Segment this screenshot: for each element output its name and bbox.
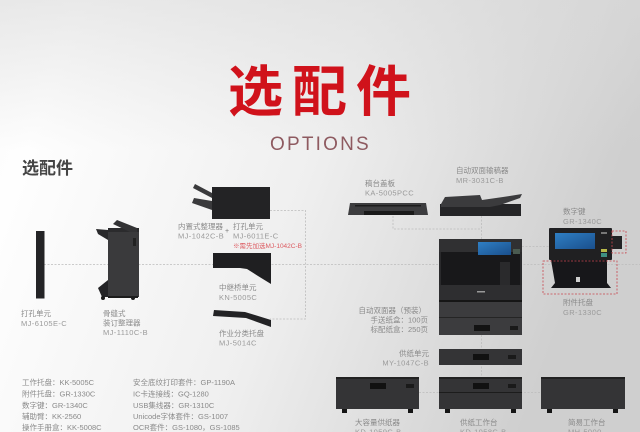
label: large capacity feeder: 大容量供纸器 [355, 417, 400, 427]
icon: bridge unit [213, 253, 271, 284]
label: saddle finisher: MJ-1110C-B [103, 328, 148, 337]
label: duplex document feeder: MR-3031C-B [456, 176, 504, 185]
tray highlight [543, 261, 617, 294]
keypad highlight [612, 231, 626, 253]
connector lines [44, 210, 640, 392]
icon: accessory tray [551, 260, 611, 288]
accessories list left: 辅助臂：KK-2560 [22, 411, 81, 421]
label: paper feed unit [382, 348, 429, 368]
label: automatic duplexer [358, 305, 428, 334]
label: punch unit MJ-6011E-C: MJ-6011E-C [233, 232, 279, 240]
label: inner finisher: 内置式整理器 [178, 221, 223, 231]
accessories list left: 数字键：GR-1340C [22, 400, 88, 410]
label: automatic duplexer: 标配纸盒：250页 [370, 324, 428, 334]
label: job separator tray: 作业分类托盘 [219, 328, 264, 338]
label: paper feed pedestal: 供纸工作台 [460, 417, 498, 427]
label: automatic duplexer: 手送纸盒：100页 [370, 314, 428, 324]
icon: control panel [549, 228, 622, 260]
section heading: 选配件 [22, 159, 73, 178]
label: accessory tray: 附件托盘 [563, 297, 593, 307]
label: saddle finisher: 骨缝式 [103, 308, 126, 318]
icon: inner finisher [192, 184, 270, 219]
label: bridge unit: KN-5005C [219, 293, 257, 302]
label: punch unit: 打孔单元 [21, 308, 51, 318]
accessories list right: IC卡连接线：GQ-1280 [133, 388, 209, 398]
icon: main multifunction printer [439, 239, 522, 335]
icon: paper feed unit [439, 349, 522, 365]
icon: simple stand [541, 377, 625, 413]
icon: paper feed pedestal [439, 377, 522, 413]
accessories list left: 附件托盘：GR-1330C [22, 388, 96, 398]
label: platen cover: KA-5005PCC [365, 188, 414, 198]
accessories list left: 操作手册盒：KK-5008C [22, 422, 102, 432]
touch screen [478, 242, 511, 255]
label: bridge unit: 中继桥单元 [219, 282, 257, 292]
accessories list right: USB集线器：GR-1310C [133, 400, 215, 410]
label: punch unit MJ-6011E-C: 打孔单元 [233, 221, 263, 231]
accessories list right: 安全底纹打印套件：GP-1190A [133, 377, 235, 387]
label: paper feed unit: 供纸单元 [399, 348, 429, 358]
label: accessory tray: GR-1330C [563, 308, 602, 317]
title: 选配件 [228, 47, 420, 127]
label: simple stand: 简易工作台 [568, 417, 606, 427]
icon: punch unit MJ-6105E-C [36, 231, 44, 298]
label: punch unit: MJ-6105E-C [21, 319, 67, 328]
icon: job separator tray [213, 310, 271, 327]
label: numeric keypad: GR-1340C [563, 217, 602, 226]
label: inner finisher: MJ-1042C-B [178, 232, 224, 240]
accessories list right: OCR套件：GS-1080，GS-1085 [133, 422, 240, 432]
icon: document feeder [440, 194, 522, 216]
label: platen cover: 稿台盖板 [365, 178, 395, 188]
label: automatic duplexer: 自动双面器（预装） [358, 305, 426, 315]
red note: ※需先加选MJ-1042C-B [233, 241, 302, 250]
label: job separator tray: MJ-5014C [219, 338, 257, 348]
label: paper feed unit: MY-1047C-B [382, 358, 429, 368]
icon: saddle finisher [96, 220, 139, 300]
icon: large capacity feeder [336, 377, 419, 413]
subtitle: OPTIONS: OPTIONS [270, 134, 371, 155]
accessories list right: Unicode字体套件：GS-1007 [133, 411, 228, 421]
label: duplex document feeder: 自动双面输稿器 [456, 165, 509, 175]
label: saddle finisher: 装订整理器 [103, 318, 141, 328]
label: numeric keypad: 数字键 [563, 206, 586, 216]
icon: platen cover [348, 203, 428, 215]
accessories list left: 工作托盘：KK-5005C [22, 377, 95, 387]
plus sign: + [225, 228, 229, 235]
